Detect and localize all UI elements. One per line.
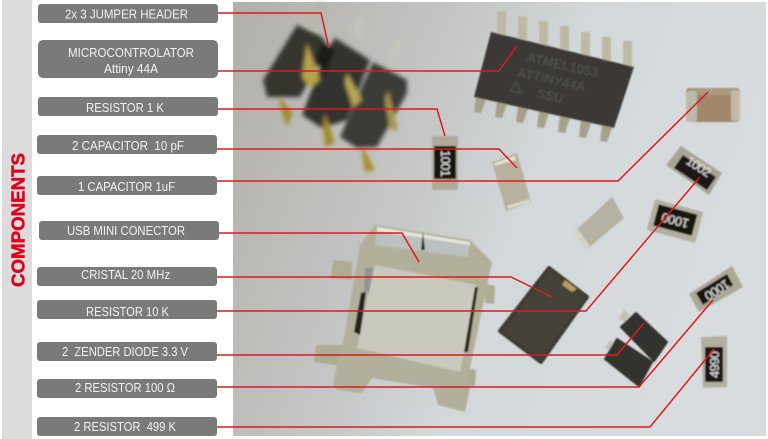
- leader line: capacitor 10 pF: [217, 149, 517, 168]
- leader line: resistor 10 K: [217, 177, 700, 311]
- connector top window: [375, 227, 470, 257]
- label: crystal: CRISTAL 20 MHz: [81, 267, 170, 282]
- label: zener diode: [37, 342, 217, 361]
- label: USB mini connector: USB MINI CONECTOR: [67, 223, 185, 238]
- resistor 1 K: 1001: [438, 150, 453, 177]
- leader line: zener diode: [217, 323, 644, 355]
- leader line: USB connector: [219, 233, 419, 262]
- connector frame: [333, 225, 492, 412]
- leader line: resistor 100: [217, 300, 713, 387]
- resistor 100 upper: [647, 199, 703, 243]
- vertical title: components: COMPONENTS: [8, 153, 28, 287]
- resistor 10 K: 1002: [683, 153, 714, 180]
- leader line: jumper header: [218, 13, 329, 48]
- label: resistor 1 K: RESISTOR 1 K: [86, 100, 164, 115]
- leader line: capacitor 1 uF: [217, 92, 708, 181]
- label: crystal: [37, 267, 217, 286]
- label: zener diode: 2 ZENDER DIODE 3.3 V: [62, 344, 188, 359]
- photo of components: [233, 2, 766, 436]
- label: resistor 1 K: [38, 97, 218, 116]
- label: capacitor 1 uF: [37, 176, 217, 195]
- label: USB mini connector: [39, 221, 219, 240]
- leader line: resistor 499 K: [217, 349, 714, 427]
- resistor 10 K: [666, 146, 722, 195]
- label: resistor 100 ohm: 2 RESISTOR 100 Ω: [75, 380, 175, 395]
- jumper header: [263, 3, 407, 172]
- capacitor 10 pF: [492, 153, 531, 211]
- resistor 100 lower: [689, 266, 743, 312]
- zener diodes: [605, 310, 667, 386]
- leader line: microcontroller: [218, 47, 516, 71]
- label: resistor 10 K: RESISTOR 10 K: [86, 304, 169, 319]
- leader line: resistor 1 K: [218, 109, 445, 136]
- resistor 100 lower: 1000: [702, 276, 733, 304]
- resistor 499 K: [701, 336, 727, 388]
- connector inner paper: [357, 265, 477, 372]
- label: resistor 499 K: 2 RESISTOR 499 K: [74, 419, 176, 434]
- photo background: [233, 2, 766, 436]
- microcontroller chip: SSU: [535, 86, 565, 106]
- resistor 499 K: 4990: [707, 351, 722, 378]
- label: capacitor 1 uF: 1 CAPACITOR 1uF: [78, 179, 175, 194]
- connector slits: [364, 268, 373, 292]
- microcontroller chip: ATMEL1053: [525, 49, 600, 80]
- label: resistor 10 K: [37, 300, 217, 319]
- label: capacitor 10 pF: 2 CAPACITOR 10 pF: [72, 138, 184, 153]
- label: resistor 100 ohm: [37, 379, 217, 398]
- capacitor 1 uF: [686, 88, 740, 122]
- crystal 20 MHz: [500, 268, 587, 362]
- microcontroller chip: ATTINY44A: [516, 65, 588, 95]
- label: microcontroller: [38, 40, 218, 78]
- label: microcontroller: Attiny 44A: [104, 61, 158, 76]
- microcontroller chip: [474, 11, 634, 142]
- label: microcontroller: MICROCONTROLATOR: [68, 45, 194, 60]
- side bar: [2, 0, 32, 439]
- label: capacitor 10 pF: [37, 135, 217, 154]
- label: jumper header: [38, 4, 218, 23]
- resistor 100 upper: 1000: [660, 210, 691, 231]
- grey capacitor: [574, 197, 624, 250]
- resistor 1 K: [432, 136, 458, 190]
- USB mini connector: [314, 225, 495, 412]
- connector side pins: [331, 260, 352, 280]
- leader line: crystal: [217, 277, 552, 297]
- label: jumper header: 2x 3 JUMPER HEADER: [65, 6, 188, 22]
- label: resistor 499 K: [37, 417, 217, 436]
